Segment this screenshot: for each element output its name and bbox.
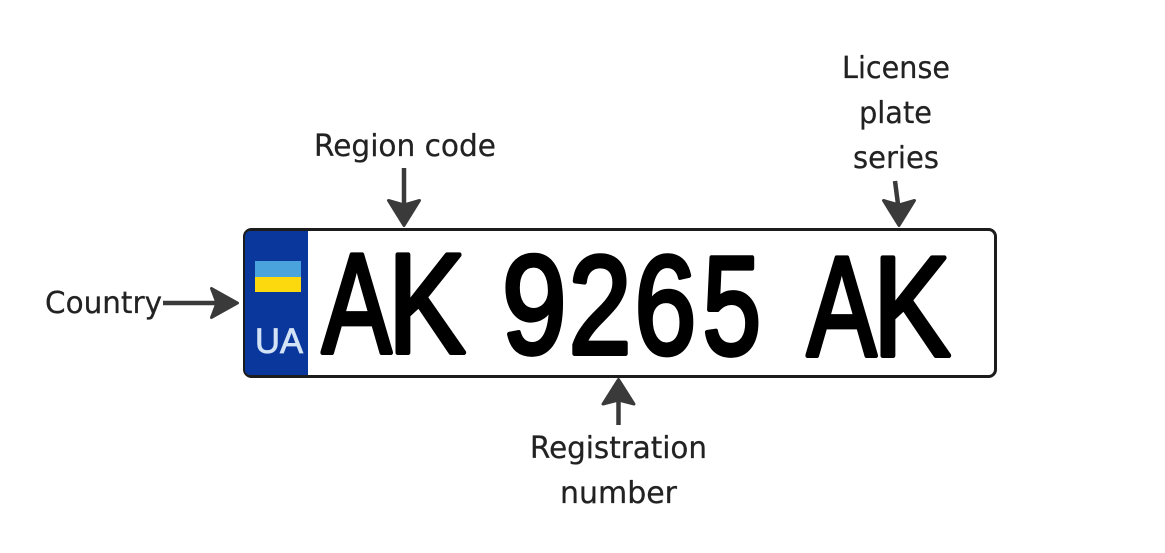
arrow: Country: [163, 288, 238, 318]
plate characters: A: [807, 228, 876, 386]
arrow: License plate series: [884, 181, 914, 226]
label: License plate series: License: [842, 51, 950, 86]
label: License plate series: plate: [859, 96, 932, 131]
label: License plate series: [842, 51, 950, 176]
label: Region code: Region code: [314, 129, 496, 164]
icon: Ukrainian flag: [255, 261, 301, 292]
country code UA: UA: [255, 322, 304, 361]
arrow: Registration number: [603, 380, 634, 425]
plate characters: 6: [634, 227, 696, 383]
arrow: Region code: [388, 168, 420, 226]
license plate: [244, 225, 996, 386]
label: Registration number: [530, 431, 707, 511]
plate characters: K: [873, 228, 950, 386]
plate characters: 2: [569, 227, 631, 383]
plate characters: A: [322, 225, 391, 383]
plate characters: 5: [703, 228, 761, 385]
label: License plate series: series: [853, 141, 939, 176]
country strip: [245, 231, 308, 375]
label: Registration number: number: [560, 476, 678, 511]
label: Country: Country: [45, 286, 162, 321]
plate body: [244, 230, 996, 376]
plate characters: K: [388, 225, 465, 383]
plate characters: 9: [502, 228, 567, 383]
label: Registration number: Registration: [530, 431, 707, 466]
plate characters: [322, 225, 950, 386]
